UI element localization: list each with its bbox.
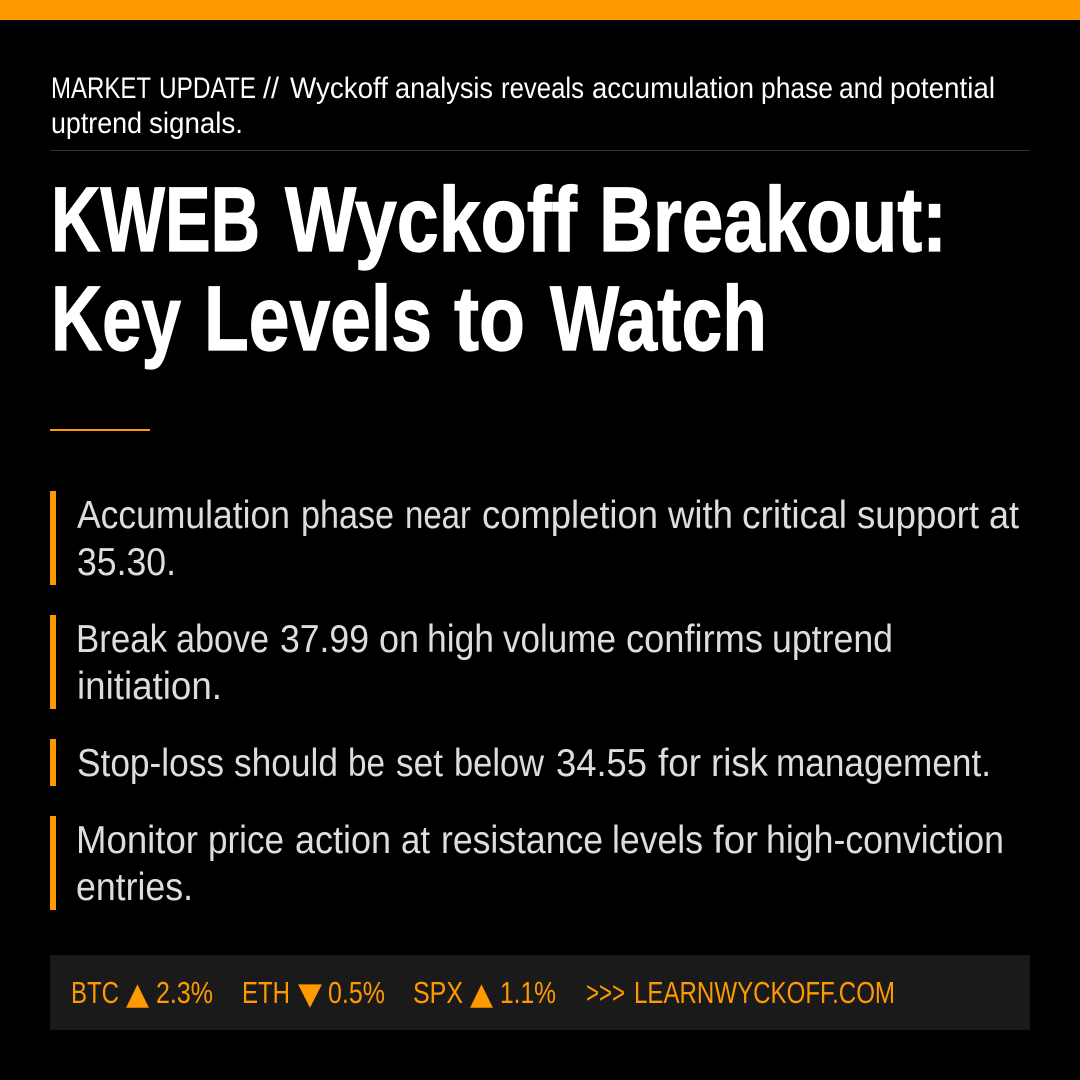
bullet 2: above (176, 618, 269, 661)
ticker bar: LEARNWYCKOFF.COM (634, 976, 895, 1010)
bullet 4: levels (612, 819, 703, 862)
bullet 4: at (401, 819, 430, 862)
bullet 3: should (234, 742, 338, 785)
header: market update: potential (890, 72, 995, 105)
bullet 1: with (667, 494, 733, 537)
header: market update: accumulation (592, 72, 754, 105)
bullet 4 (50, 816, 1004, 910)
top accent bar (0, 0, 1080, 20)
ticker bar: SPX (413, 976, 463, 1010)
bullet 1: phase (301, 494, 394, 537)
header: market update: and (839, 72, 883, 105)
bullet 4: price (208, 819, 284, 862)
header: market update: analysis (395, 72, 493, 105)
header: market update: // (263, 72, 280, 105)
bullet 1: near (405, 494, 471, 537)
bullet 1: 35.30. (77, 541, 176, 584)
bullet 3: management. (776, 742, 991, 785)
ticker bar: >>> (586, 976, 625, 1010)
orange divider (50, 429, 150, 431)
ticker bar: 1.1% (500, 976, 556, 1010)
bullet 2: on (379, 618, 419, 661)
bullet 4: Monitor (76, 819, 198, 862)
header: market update: Wyckoff (290, 72, 389, 105)
bullet 2: volume (503, 618, 616, 661)
bullet 4: action (295, 819, 391, 862)
bullet 3: set (396, 742, 443, 785)
title: Levels (204, 268, 432, 370)
bullet 1: support (857, 494, 979, 537)
bullet 4: entries. (76, 866, 193, 909)
title: Wyckoff (285, 169, 577, 271)
title: KWEB (51, 169, 260, 271)
header: market update: reveals (501, 72, 584, 105)
bullet 3: 34.55 (556, 742, 647, 785)
title: Breakout: (599, 169, 947, 271)
bullet 3 (50, 739, 991, 786)
title (51, 169, 947, 370)
ticker bar: ▼ (298, 977, 323, 1012)
ticker bar: ▲ (126, 977, 150, 1012)
bullet 2: 37.99 (280, 618, 369, 661)
bullet 2: confirms (626, 618, 763, 661)
title: to (454, 268, 525, 370)
bullet 4: resistance (441, 819, 603, 862)
ticker bar: ETH (242, 976, 290, 1010)
header: market update: MARKET (51, 72, 151, 105)
bullet 2: high (427, 618, 494, 661)
ticker bar: BTC (71, 976, 119, 1010)
ticker bar: ▲ (470, 977, 494, 1012)
bullet 3: be (348, 742, 385, 785)
bullet 2: uptrend (772, 618, 893, 661)
bullet 3: risk (711, 742, 769, 785)
bullet 2: initiation. (77, 665, 222, 708)
bullet 2 (50, 615, 893, 709)
header: market update: uptrend (51, 107, 142, 140)
bullet 2: Break (76, 618, 168, 661)
bullet 1: critical (742, 494, 847, 537)
bullet 4: high-conviction (766, 819, 1004, 862)
header: market update: signals. (149, 107, 243, 140)
bullet 1 (50, 491, 1019, 585)
ticker bar: 2.3% (156, 976, 213, 1010)
bullet 1: completion (482, 494, 658, 537)
bullet 3: below (454, 742, 544, 785)
header: market update: UPDATE (159, 72, 256, 105)
title: Watch (550, 268, 767, 370)
header: market update (51, 72, 995, 140)
bullet 1: Accumulation (77, 494, 290, 537)
bullet 4: for (713, 819, 758, 862)
bullet 3: for (658, 742, 701, 785)
ticker bar (50, 955, 1030, 1030)
bullet 3: Stop-loss (77, 742, 224, 785)
bullet 1: at (989, 494, 1019, 537)
ticker bar: 0.5% (328, 976, 385, 1010)
title: Key (51, 268, 181, 370)
header: market update: phase (761, 72, 833, 105)
